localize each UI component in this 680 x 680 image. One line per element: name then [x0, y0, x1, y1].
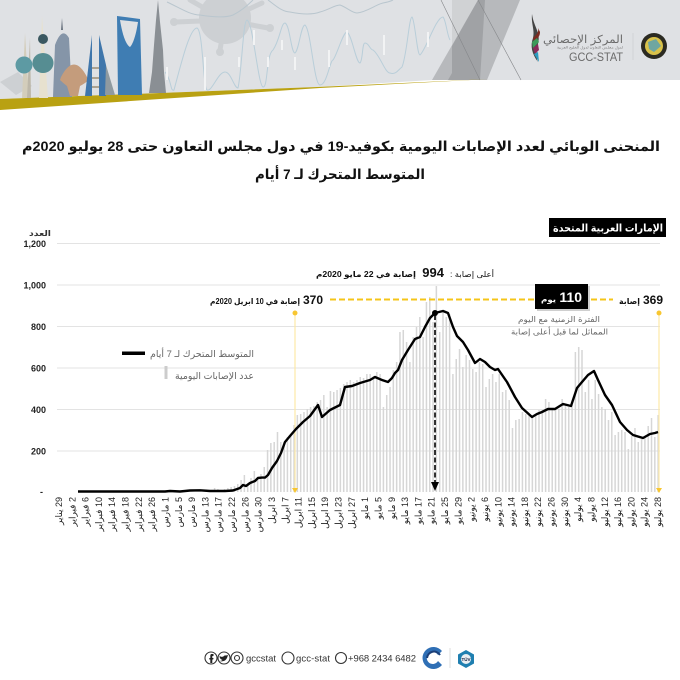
y axis labels: 400	[31, 405, 46, 415]
logo subtitle: لدول مجلس التعاون لدول الخليج العربية	[557, 46, 623, 50]
y axis labels: 800	[31, 322, 46, 332]
x axis labels: 4 يوليو	[573, 497, 583, 523]
icon: certification C	[423, 647, 442, 669]
x axis labels: 13 مارس	[200, 497, 210, 532]
header banner	[0, 0, 680, 110]
x axis labels: 6 فبراير	[81, 497, 91, 527]
peak arrow	[431, 310, 439, 491]
x axis labels: 29 يناير	[54, 497, 64, 526]
x axis labels	[54, 497, 663, 532]
callout: 110 days: يوم	[541, 295, 556, 304]
x axis labels: 2 فبراير	[67, 497, 77, 527]
Bahrain towers	[85, 35, 115, 96]
y axis labels: 1,200	[23, 239, 46, 249]
x axis labels: 9 مايو	[387, 497, 397, 520]
x axis labels: 30 مارس	[254, 497, 264, 532]
annotation lines	[292, 310, 662, 493]
callout: 370 cases: إصابة في 10 ابريل 2020م	[210, 297, 300, 306]
callout: peak	[316, 265, 494, 280]
icon: ribbon	[532, 14, 539, 62]
logo text latin: GCC-STAT	[569, 52, 623, 64]
icon: social media	[205, 652, 346, 664]
callout: 110 days: 110	[559, 289, 582, 305]
callout: 369 cases: 369	[643, 293, 663, 307]
x axis labels: 10 فبراير	[94, 497, 104, 532]
callout note: الفترة الزمنية مع اليوم	[518, 315, 600, 324]
title	[22, 138, 660, 183]
twisted tower	[53, 18, 72, 97]
Burj Khalifa	[149, 0, 166, 93]
country label: الإمارات العربية المتحدة	[553, 222, 663, 234]
country label	[549, 218, 666, 237]
gold wedge	[0, 79, 490, 110]
legend: daily cases: عدد الإصابات اليومية	[175, 371, 254, 382]
y axis labels: 1,000	[23, 280, 46, 290]
callout: 369 cases: إصابة	[619, 297, 640, 306]
x axis labels: 5 مارس	[174, 497, 184, 527]
x axis labels: 9 مارس	[187, 497, 197, 527]
callout: 110 days	[535, 284, 590, 311]
title line 2: المتوسط المتحرك لـ 7 أيام	[255, 165, 425, 183]
x axis labels: 5 مايو	[374, 497, 384, 520]
icon: gulf skyline	[16, 0, 166, 98]
grid lines	[57, 244, 660, 451]
handle: gccstat: gccstat	[246, 654, 276, 664]
virus watermark	[0, 0, 274, 95]
x axis labels: 17 مارس	[214, 497, 224, 532]
x axis labels: 16 يوليو	[613, 497, 623, 528]
x axis labels: 20 يوليو	[626, 497, 636, 528]
x axis labels: 22 مارس	[227, 497, 237, 532]
x axis labels: 1 مايو	[360, 497, 370, 520]
x axis labels: 21 مايو	[427, 497, 437, 525]
callout: peak: إصابة في 22 مايو 2020م	[316, 270, 416, 279]
x axis labels: 22 فبراير	[134, 497, 144, 532]
x axis labels: 26 يونيو	[547, 497, 557, 528]
icon: TUV badge: TÜV	[462, 656, 470, 662]
x axis labels: 18 فبراير	[121, 497, 131, 532]
y axis labels: -	[40, 487, 43, 497]
x axis labels: 29 مايو	[453, 497, 463, 525]
x axis labels: 15 ابريل	[307, 497, 317, 529]
x axis labels: 7 ابريل	[280, 497, 290, 524]
callout: 370 cases: 370	[303, 293, 323, 307]
x axis labels: 12 يوليو	[600, 497, 610, 528]
faint line chart	[165, 17, 450, 90]
title line 1: المنحنى الوبائي لعدد الإصابات اليومية بكوفيد-19 في دول مجلس التعاون حتى 28 يوليو 2020م	[22, 138, 660, 155]
dome building	[60, 64, 89, 96]
x axis labels: 14 فبراير	[107, 497, 117, 532]
chart	[23, 229, 663, 532]
logo text arabic: المركز الإحصائي	[543, 34, 623, 46]
y axis labels	[23, 239, 46, 497]
x axis labels: 13 مايو	[400, 497, 410, 525]
icon: GCC emblem	[641, 33, 667, 59]
x axis labels: 11 ابريل	[294, 497, 304, 528]
callout note	[511, 315, 608, 338]
legend	[122, 347, 254, 382]
x axis labels: 1 مارس	[160, 497, 170, 527]
logo: GCC-STAT	[532, 14, 667, 64]
phone number: +968 2434 6482	[348, 654, 416, 664]
icon: TUV badge	[458, 650, 474, 668]
callout: peak: أعلى إصابة :	[450, 269, 494, 280]
x axis labels: 3 ابريل	[267, 497, 277, 524]
x axis labels: 26 فبراير	[147, 497, 157, 532]
x axis labels: 6 يونيو	[480, 497, 490, 523]
diagonal bands	[452, 0, 478, 46]
x axis labels: 19 ابريل	[320, 497, 330, 529]
dashed reference line	[330, 298, 613, 300]
x axis labels: 10 يونيو	[493, 497, 503, 528]
callout: peak: 994	[422, 265, 445, 280]
x axis labels: 2 يونيو	[467, 497, 477, 523]
callout: 369 cases	[619, 293, 663, 307]
x axis labels: 30 يونيو	[560, 497, 570, 528]
x axis labels: 17 مايو	[413, 497, 423, 525]
x axis labels: 25 مايو	[440, 497, 450, 525]
x axis labels: 8 يوليو	[586, 497, 596, 523]
Kuwait towers	[16, 16, 54, 98]
legend: moving average: المتوسط المتحرك لـ 7 أيام	[150, 347, 254, 360]
x axis labels: 26 مارس	[240, 497, 250, 532]
daily cases bars	[215, 286, 658, 492]
x axis labels: 28 يوليو	[653, 497, 663, 528]
y axis labels: 200	[31, 446, 46, 456]
footer contacts	[205, 647, 474, 669]
handle: gcc-stat: gcc-stat	[296, 654, 330, 664]
x axis labels: 18 يونيو	[520, 497, 530, 528]
Kingdom tower	[117, 16, 142, 95]
y axis labels: 600	[31, 364, 46, 374]
7-day moving average line	[78, 311, 658, 492]
callout note: المماثل لما قبل أعلى إصابة	[511, 326, 608, 338]
y axis title: العدد	[29, 229, 51, 238]
x axis labels: 24 يوليو	[640, 497, 650, 528]
x axis labels: 27 ابريل	[347, 497, 357, 529]
callout: 370 cases	[210, 293, 323, 307]
x axis labels: 23 ابريل	[334, 497, 344, 529]
x axis labels: 22 يونيو	[533, 497, 543, 528]
x axis labels: 14 يونيو	[507, 497, 517, 528]
